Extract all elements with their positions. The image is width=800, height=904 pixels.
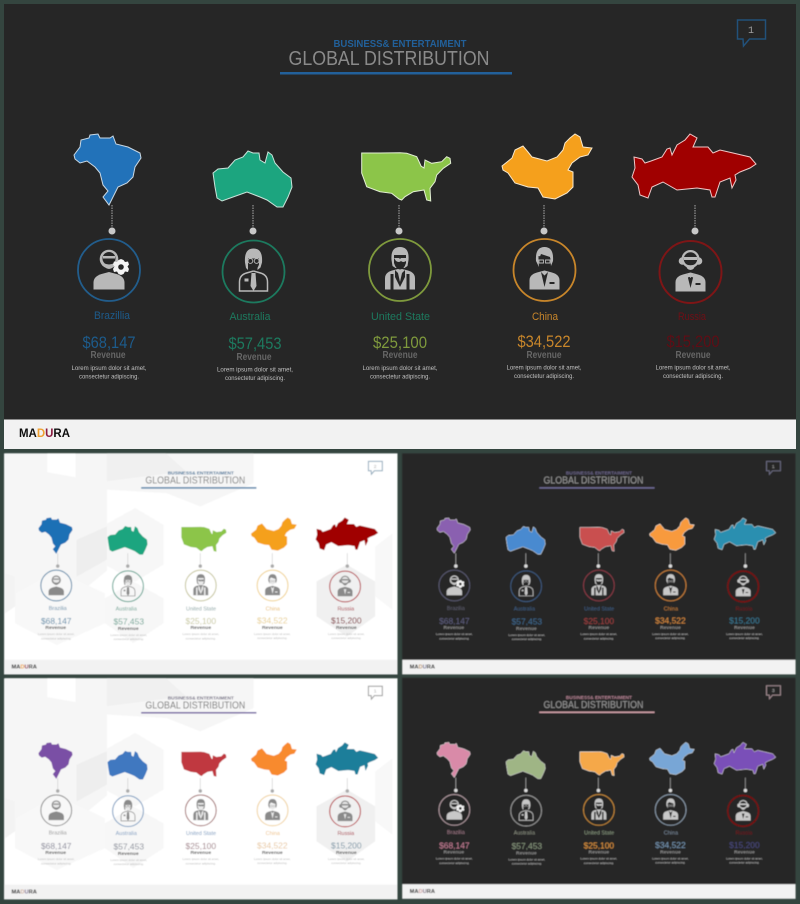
description <box>436 632 473 640</box>
column: Australia <box>213 151 293 382</box>
value: $25,100 <box>373 333 427 352</box>
value: $25,100 <box>584 616 614 626</box>
description: Lorem ipsum dolor sit amet, <box>509 857 545 861</box>
value: $68,147 <box>41 841 72 851</box>
description <box>506 366 582 380</box>
description: Lorem ipsum dolor sit amet, <box>38 632 75 636</box>
description: Lorem ipsum dolor sit amet, <box>652 632 689 636</box>
column: Brazil <box>436 518 473 640</box>
description: Lorem ipsum dolor sit amet, <box>38 857 75 861</box>
avatar <box>728 571 759 602</box>
avatar <box>728 796 759 826</box>
avatar <box>511 571 542 602</box>
connector <box>346 553 349 568</box>
description <box>254 632 291 640</box>
value: $15,200 <box>331 841 362 851</box>
description: Lorem ipsum dolor sit amet, <box>436 632 473 636</box>
value: $25,100 <box>584 841 614 851</box>
description: Lorem ipsum dolor sit amet, <box>436 857 473 861</box>
icon: page number bubble <box>767 686 780 699</box>
name: Brazilia <box>447 830 466 836</box>
description: consectetur adipiscing. <box>186 861 216 865</box>
map: Brazil <box>437 742 470 778</box>
avatar <box>511 795 542 826</box>
connector <box>524 553 528 568</box>
value: $68,147 <box>439 616 470 626</box>
map: United States <box>362 153 451 201</box>
heading: GLOBAL DISTRIBUTION <box>145 701 245 712</box>
description <box>581 632 617 640</box>
description <box>581 857 617 865</box>
description <box>182 632 219 640</box>
value: $15,200 <box>666 332 720 351</box>
map: United States <box>580 527 624 551</box>
value: $57,453 <box>114 617 144 627</box>
description: Lorem ipsum dolor sit amet, <box>217 368 293 374</box>
name: Russia <box>337 831 355 837</box>
connector <box>597 778 600 792</box>
description: consectetur adipiscing. <box>331 861 362 865</box>
column: Australia <box>108 526 147 641</box>
avatar <box>439 570 470 601</box>
avatar <box>185 795 216 826</box>
column: Russia <box>316 743 378 865</box>
name: United State <box>186 831 216 837</box>
description: consectetur adipiscing. <box>41 861 72 865</box>
description: consectetur adipiscing. <box>663 374 723 380</box>
column: Russia <box>632 134 756 380</box>
connector <box>744 553 747 568</box>
caption: Revenue <box>734 625 755 631</box>
name: China <box>266 606 281 612</box>
description <box>254 857 291 865</box>
column: United States <box>362 153 451 380</box>
description <box>328 632 365 640</box>
description <box>182 857 219 865</box>
heading <box>539 471 655 489</box>
footer bar with logo: MADURA <box>12 664 37 670</box>
value: $34,522 <box>257 616 288 626</box>
avatar <box>330 571 360 602</box>
description: consectetur adipiscing. <box>655 636 686 640</box>
value: $34,522 <box>655 616 686 626</box>
name: Russia <box>736 831 753 837</box>
column: Brazil <box>436 742 473 865</box>
name: Brazilia <box>447 606 466 612</box>
icon: page number bubble <box>368 686 382 699</box>
name: Australia <box>230 311 271 323</box>
value: $57,453 <box>114 842 144 852</box>
description: Lorem ipsum dolor sit amet, <box>110 858 147 862</box>
description: consectetur adipiscing. <box>114 637 144 641</box>
connector <box>126 553 130 568</box>
name: China <box>664 831 679 837</box>
connector <box>454 553 458 568</box>
value: $34,522 <box>655 840 686 850</box>
caption: Revenue <box>589 625 609 631</box>
description <box>38 632 75 640</box>
avatar <box>41 795 72 826</box>
map: Australia <box>213 151 292 207</box>
column: China <box>251 518 296 640</box>
caption: Revenue <box>676 350 711 361</box>
connector <box>597 553 600 568</box>
description: consectetur adipiscing. <box>331 636 362 640</box>
avatar <box>369 239 431 301</box>
description: consectetur adipiscing. <box>114 862 144 866</box>
map: Russia <box>316 743 378 775</box>
panel: main dark slide <box>4 4 796 449</box>
map: Brazil <box>39 518 72 553</box>
caption: Revenue <box>589 850 609 856</box>
value: $57,453 <box>228 334 282 353</box>
caption: Revenue <box>118 626 139 632</box>
map: Australia <box>108 526 147 554</box>
connector <box>396 205 402 234</box>
connector <box>540 205 548 234</box>
description: consectetur adipiscing. <box>512 637 542 641</box>
icon: page number bubble: 1 <box>772 464 775 470</box>
caption: Revenue <box>190 850 211 856</box>
description: Lorem ipsum dolor sit amet, <box>581 632 617 636</box>
description: Lorem ipsum dolor sit amet, <box>328 632 365 636</box>
value: $34,522 <box>257 841 288 851</box>
description: Lorem ipsum dolor sit amet, <box>328 857 365 861</box>
column: United States <box>580 527 624 640</box>
caption: Revenue <box>336 850 357 856</box>
avatar <box>514 239 576 301</box>
footer bar with logo: MADURA <box>19 428 70 440</box>
connector <box>56 553 59 568</box>
heading <box>141 471 256 489</box>
heading: BUSINESS& ENTERTAIMENT <box>168 696 234 702</box>
description: Lorem ipsum dolor sit amet, <box>656 366 731 372</box>
avatar <box>583 570 614 601</box>
caption: Revenue <box>660 625 681 631</box>
name: China <box>664 606 679 612</box>
description <box>656 366 731 380</box>
heading: BUSINESS& ENTERTAIMENT <box>168 471 234 477</box>
icon: page number bubble <box>738 20 766 46</box>
caption: Revenue <box>262 625 283 631</box>
map: China <box>502 134 592 199</box>
description <box>726 856 763 865</box>
connector <box>199 553 202 568</box>
connector <box>454 778 458 792</box>
description: consectetur adipiscing. <box>41 636 72 640</box>
connector <box>744 778 747 792</box>
caption: Revenue <box>118 851 139 857</box>
description <box>72 366 147 380</box>
description: Lorem ipsum dolor sit amet, <box>726 856 763 860</box>
column: United States <box>182 752 226 865</box>
column: China <box>502 134 592 380</box>
avatar <box>583 795 614 825</box>
connector <box>108 205 116 234</box>
name: Russia <box>736 606 753 612</box>
panel: dark slide, pink theme <box>402 678 796 899</box>
name: United State <box>371 311 430 323</box>
description: consectetur adipiscing. <box>257 861 288 865</box>
name: China <box>266 831 281 837</box>
value: $25,100 <box>186 616 216 626</box>
column: Australia <box>506 751 545 866</box>
value: $68,147 <box>82 333 136 352</box>
icon: page number bubble <box>767 461 780 474</box>
caption: Revenue <box>45 625 66 631</box>
icon: page number bubble: 1 <box>374 689 377 695</box>
avatar <box>78 239 140 301</box>
connector <box>669 553 672 568</box>
description: consectetur adipiscing. <box>655 861 686 865</box>
map: United States <box>580 752 624 776</box>
footer bar with logo: MADURA <box>410 889 435 895</box>
name: United State <box>584 606 614 612</box>
description: Lorem ipsum dolor sit amet, <box>254 632 291 636</box>
description <box>110 858 147 866</box>
map: China <box>650 518 694 550</box>
panel: dark slide, purple theme <box>402 453 796 674</box>
connector <box>669 778 672 792</box>
footer bar with logo <box>4 660 397 674</box>
description: Lorem ipsum dolor sit amet, <box>182 857 219 861</box>
caption: Revenue <box>734 850 755 856</box>
name: Australia <box>116 831 138 837</box>
heading <box>141 696 256 714</box>
value: $15,200 <box>331 616 362 626</box>
map: Russia <box>714 742 776 774</box>
name: Russia <box>337 606 355 612</box>
avatar <box>330 796 360 827</box>
column: Australia <box>506 526 545 641</box>
caption: Revenue <box>190 625 211 631</box>
map: Brazil <box>74 134 141 205</box>
connector <box>56 778 59 793</box>
heading: GLOBAL DISTRIBUTION <box>543 476 643 487</box>
icon: page number bubble <box>368 461 382 474</box>
description <box>652 856 689 865</box>
connector <box>271 778 274 793</box>
description <box>328 857 365 865</box>
map: Brazil <box>39 743 72 778</box>
description: Lorem ipsum dolor sit amet, <box>72 366 147 372</box>
heading: GLOBAL DISTRIBUTION <box>145 476 245 487</box>
description: Lorem ipsum dolor sit amet, <box>182 632 219 636</box>
avatar <box>655 570 686 601</box>
column: Russia <box>316 518 378 640</box>
description: consectetur adipiscing. <box>186 636 216 640</box>
heading: GLOBAL DISTRIBUTION <box>543 700 643 711</box>
caption: Revenue <box>262 850 283 856</box>
name: United State <box>186 606 216 612</box>
description <box>652 632 689 640</box>
description: consectetur adipiscing. <box>370 374 430 380</box>
description: consectetur adipiscing. <box>79 374 139 380</box>
column: China <box>650 518 694 640</box>
description: consectetur adipiscing. <box>584 861 614 865</box>
description: Lorem ipsum dolor sit amet, <box>581 857 617 861</box>
connector <box>271 553 274 568</box>
map: Brazil <box>437 518 470 553</box>
name: Brazilia <box>49 831 68 837</box>
name: Australia <box>116 606 138 612</box>
description: consectetur adipiscing. <box>584 636 614 640</box>
description: consectetur adipiscing. <box>514 374 574 380</box>
heading <box>539 695 655 713</box>
map: Australia <box>108 751 147 779</box>
column: Brazil <box>72 134 147 380</box>
name: Russia <box>678 311 707 323</box>
footer bar with logo <box>402 884 796 899</box>
map: China <box>251 743 296 775</box>
heading: main <box>280 39 512 74</box>
footer bar with logo <box>4 885 397 899</box>
column: Australia <box>108 751 147 866</box>
column: Russia <box>714 742 776 865</box>
connector <box>346 778 349 793</box>
map: United States <box>182 752 226 776</box>
description <box>38 857 75 865</box>
value: $68,147 <box>439 841 470 851</box>
avatar <box>113 571 143 602</box>
map: United States <box>182 527 226 551</box>
connector <box>250 205 256 234</box>
caption: Revenue <box>526 350 562 361</box>
column: China <box>251 743 296 865</box>
footer bar with logo <box>402 660 796 674</box>
value: $25,100 <box>186 841 216 851</box>
connector <box>524 778 528 792</box>
description <box>217 368 293 382</box>
caption: Revenue <box>660 850 681 856</box>
map: Australia <box>506 526 545 554</box>
caption: Revenue <box>236 352 272 363</box>
avatar <box>185 570 216 601</box>
column: Brazil <box>38 518 75 640</box>
map: China <box>650 742 694 775</box>
description: Lorem ipsum dolor sit amet, <box>506 366 582 372</box>
caption: Revenue <box>336 625 357 631</box>
column: China <box>650 742 694 865</box>
column: Brazil <box>38 743 75 865</box>
name: Brazilia <box>49 606 68 612</box>
avatar <box>257 795 288 826</box>
value: $34,522 <box>518 332 570 351</box>
description: Lorem ipsum dolor sit amet, <box>509 633 545 637</box>
heading: BUSINESS& ENTERTAIMENT <box>566 695 632 701</box>
connector <box>126 778 130 793</box>
caption: Revenue <box>45 850 66 856</box>
description: Lorem ipsum dolor sit amet, <box>362 366 438 372</box>
map: Russia <box>316 518 378 550</box>
description <box>509 857 545 866</box>
icon: page number bubble: 3 <box>772 688 775 694</box>
avatar <box>257 570 288 601</box>
description <box>362 366 438 380</box>
caption: Revenue <box>444 625 464 631</box>
map: China <box>251 518 296 550</box>
description: consectetur adipiscing. <box>729 861 760 865</box>
column: Russia <box>714 518 776 640</box>
caption: Revenue <box>444 850 464 856</box>
description: consectetur adipiscing. <box>225 376 285 382</box>
description: consectetur adipiscing. <box>439 636 470 640</box>
avatar <box>660 241 722 303</box>
description <box>509 633 545 641</box>
map: Australia <box>506 751 545 779</box>
column: United States <box>580 752 624 865</box>
map: Russia <box>714 518 776 550</box>
name: Australia <box>514 831 536 837</box>
footer bar with logo: MADURA <box>12 889 37 895</box>
name: China <box>532 311 559 323</box>
heading: main: BUSINESS& ENTERTAIMENT <box>334 39 466 50</box>
caption: Revenue <box>90 350 126 361</box>
description: Lorem ipsum dolor sit amet, <box>726 632 763 636</box>
name: United State <box>584 831 614 837</box>
description <box>436 857 473 865</box>
avatar <box>113 796 143 827</box>
avatar <box>222 240 284 302</box>
description: consectetur adipiscing. <box>512 862 542 866</box>
footer bar with logo <box>4 420 796 449</box>
value: $15,200 <box>729 840 760 850</box>
value: $57,453 <box>512 841 542 851</box>
connector <box>199 778 202 793</box>
icon: page number bubble: 1 <box>748 26 754 37</box>
description: consectetur adipiscing. <box>439 861 470 865</box>
description: consectetur adipiscing. <box>729 636 760 640</box>
connector <box>692 205 698 234</box>
caption: Revenue <box>516 851 537 857</box>
panel: light slide, purple theme <box>4 678 397 899</box>
heading: main: GLOBAL DISTRIBUTION <box>288 48 490 70</box>
caption: Revenue <box>516 626 537 632</box>
caption: Revenue <box>382 350 418 361</box>
description: consectetur adipiscing. <box>257 636 288 640</box>
description: Lorem ipsum dolor sit amet, <box>110 633 147 637</box>
value: $57,453 <box>512 617 542 627</box>
description <box>726 632 763 640</box>
value: $15,200 <box>729 616 760 626</box>
description: Lorem ipsum dolor sit amet, <box>652 856 689 860</box>
avatar <box>41 570 72 601</box>
map: Russia <box>632 134 756 198</box>
panel: light slide, original colours <box>4 453 397 674</box>
description: Lorem ipsum dolor sit amet, <box>254 857 291 861</box>
name: Brazillia <box>94 310 131 322</box>
heading: BUSINESS& ENTERTAIMENT <box>566 471 632 477</box>
description <box>110 633 147 641</box>
avatar <box>655 795 686 825</box>
footer bar with logo: MADURA <box>410 664 435 670</box>
column: United States <box>182 527 226 640</box>
name: Australia <box>514 606 536 612</box>
icon: page number bubble: 2 <box>374 464 377 470</box>
avatar <box>439 795 470 825</box>
value: $68,147 <box>41 616 72 626</box>
